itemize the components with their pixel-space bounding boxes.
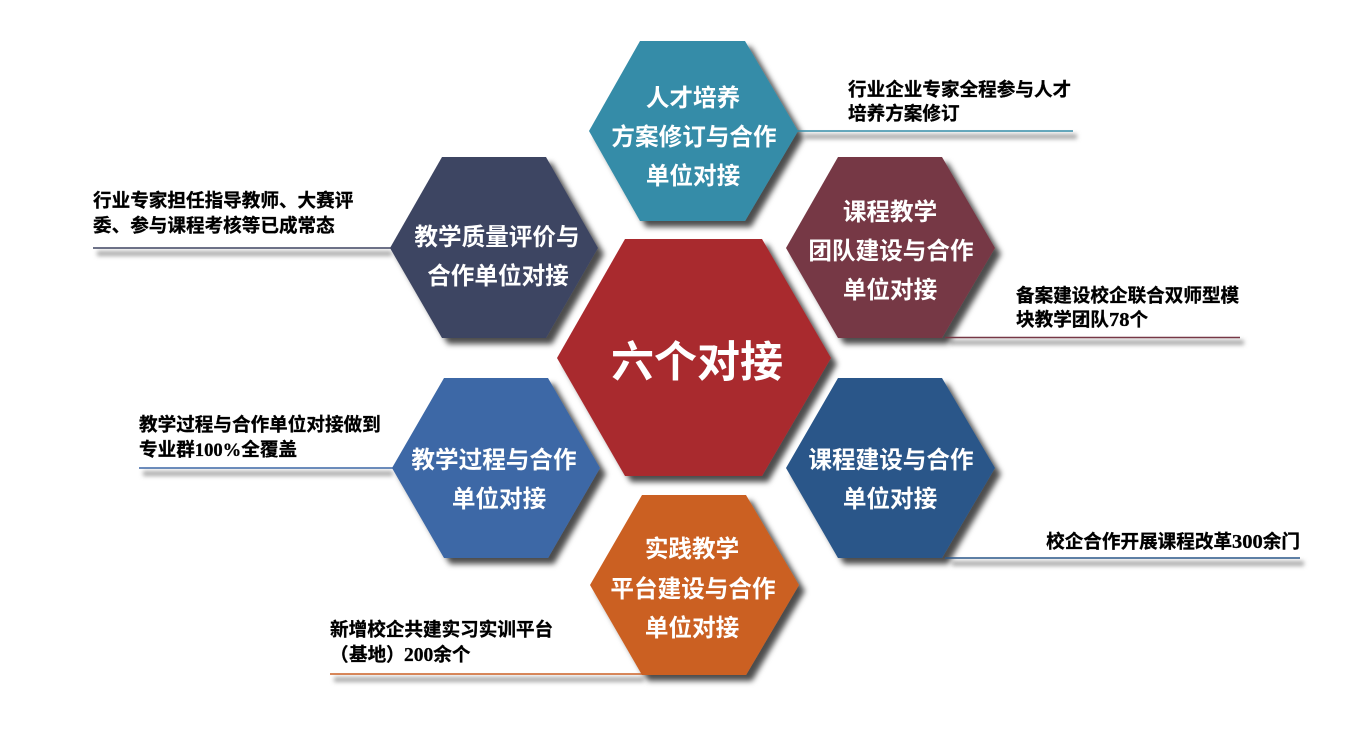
callout: practice platform [330,619,645,674]
hexagon: curriculum construction [786,378,995,558]
hexagon: teaching quality evaluation: 教学质量评价与 [414,218,580,252]
callout: teaching team: 备案建设校企联合双师型模 [1016,285,1240,307]
callout: teaching process: 教学过程与合作单位对接做到 [139,414,381,436]
hexagon: curriculum construction: 单位对接 [843,480,937,514]
callout: practice platform: 新增校企共建实习实训平台 [330,619,553,641]
callout: teaching team: 块教学团队78个 [1016,309,1148,331]
callout: teaching team [945,285,1240,338]
hexagon: talent training plan: 人才培养 [646,79,740,113]
callout line shadows [97,134,1304,682]
callout: teaching process: 专业群100%全覆盖 [139,439,297,461]
callout: teaching quality evaluation: 委、参与课程考核等已成常态 [93,215,335,237]
hexagon: center title: 六个对接 [611,328,783,390]
callout: teaching quality evaluation [93,190,392,248]
hexagon: teaching team: 课程教学 [843,193,937,227]
callout: teaching process [139,414,394,468]
hexagon: talent training plan: 方案修订与合作 [611,118,777,152]
callout: practice platform: 基地 [349,644,387,666]
hexagon: teaching quality evaluation [390,157,598,338]
hexagon: teaching team: 单位对接 [843,271,937,305]
callout: practice platform: 200 [404,645,433,666]
hexagon: curriculum construction: 课程建设与合作 [808,441,974,475]
hexagon: center title [557,239,831,476]
hexagon: talent training plan [589,41,798,221]
callout: practice platform: 余个 [433,645,470,666]
hexagon: teaching process: 教学过程与合作 [411,441,577,475]
callout: talent training plan: 培养方案修订 [848,103,960,125]
hexagon: practice platform: 单位对接 [645,609,739,643]
callout: practice platform: （ [330,645,349,666]
hexagon: practice platform [590,495,799,675]
hexagon: teaching process: 单位对接 [452,480,546,514]
hexagon: practice platform: 平台建设与合作 [610,570,776,604]
callout: talent training plan [797,79,1073,131]
hexagon: talent training plan: 单位对接 [646,157,740,191]
hexagon: teaching quality evaluation: 合作单位对接 [427,257,569,291]
hexagon: teaching process [392,378,600,558]
callout: practice platform: ） [386,645,405,666]
callout: teaching quality evaluation: 行业专家担任指导教师、大赛评 [93,190,354,212]
callout: curriculum construction: 校企合作开展课程改革300余门 [1046,531,1300,553]
callout: talent training plan: 行业企业专家全程参与人才 [848,79,1071,101]
hexagon: teaching team: 团队建设与合作 [808,232,974,266]
hexagon: teaching team [786,157,995,338]
hexagon: practice platform: 实践教学 [645,530,739,564]
